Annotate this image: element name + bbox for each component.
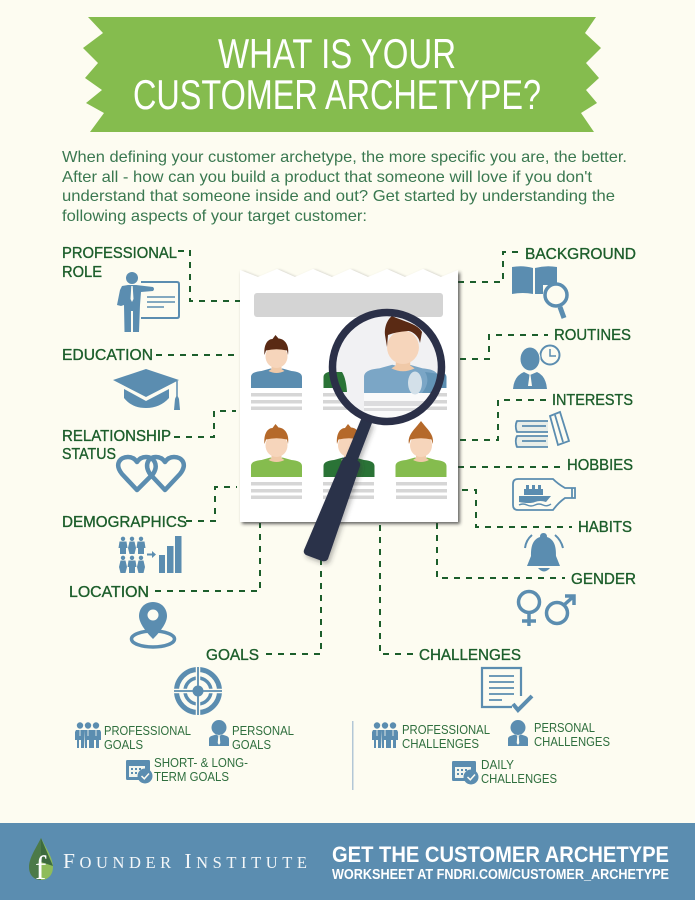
footer band: [0, 823, 695, 900]
label: background: BACKGROUND: [525, 246, 636, 263]
challenges: daily: [452, 757, 557, 786]
goals: personal: [209, 720, 294, 752]
icon: target: [173, 666, 223, 716]
lens rim: [332, 312, 442, 422]
lens glass: [335, 315, 439, 419]
label: professional role: ROLE: [62, 264, 102, 281]
challenges: personal: PERSONAL: [534, 720, 595, 735]
call to action: GET THE CUSTOMER ARCHETYPE: [332, 842, 669, 867]
challenges: daily: CHALLENGES: [481, 771, 557, 786]
challenges: personal: CHALLENGES: [534, 734, 610, 749]
label: demographics: DEMOGRAPHICS: [62, 514, 187, 531]
label: interests: INTERESTS: [552, 392, 633, 409]
icon: ship in a bottle: [513, 479, 575, 510]
icon: checklist document: [482, 668, 532, 710]
challenges: professional: PROFESSIONAL: [402, 722, 490, 737]
icon: gender symbols: [518, 592, 574, 626]
icon: person with clock: [513, 346, 560, 389]
label: relationship status: RELATIONSHIP: [62, 428, 171, 445]
label: relationship status: STATUS: [62, 446, 116, 463]
goals: personal: GOALS: [232, 737, 271, 752]
challenges: daily: DAILY: [481, 757, 514, 772]
title banner: [83, 17, 601, 132]
icon: graduation cap: [113, 369, 180, 410]
magnifying glass: [304, 312, 454, 561]
label: relationship status: [62, 428, 171, 463]
icon: bell: [525, 533, 563, 572]
intro paragraph: following aspects of your target customer:: [62, 208, 367, 225]
challenges: professional: [372, 722, 490, 751]
person 6: [396, 421, 446, 477]
icon: presenter at board: [117, 272, 180, 332]
wordmark: F OUNDER I NSTITUTE: [63, 849, 307, 873]
label: habits: HABITS: [578, 519, 632, 536]
dashed connectors: [155, 250, 572, 654]
goals: short and long term: TERM GOALS: [154, 769, 229, 784]
label: hobbies: HOBBIES: [567, 457, 633, 474]
label: gender: GENDER: [571, 571, 636, 588]
label: goals: GOALS: [206, 647, 259, 664]
paper: [240, 269, 458, 522]
magnified person: [336, 316, 438, 418]
person 2: [324, 368, 374, 388]
person 3: [396, 368, 446, 388]
label: education: EDUCATION: [62, 347, 153, 364]
intro paragraph: When defining your customer archetype, the more specific you are, the better.: [62, 149, 627, 166]
label: professional role: PROFESSIONAL: [62, 245, 177, 262]
goals: short and long term: [126, 755, 248, 784]
goals: short and long term: SHORT- & LONG-: [154, 755, 248, 770]
person 5: [324, 424, 374, 477]
call to action: [332, 842, 669, 883]
handle: [304, 417, 372, 561]
label: location: LOCATION: [69, 584, 149, 601]
person 1: [251, 335, 302, 388]
challenges: personal: [508, 720, 610, 749]
customer profile sheet: [240, 269, 458, 522]
header bar: [254, 293, 443, 317]
icon: people to bar chart: [118, 536, 182, 573]
icon: stack of books: [515, 412, 569, 447]
label: professional role: [62, 245, 177, 281]
person 4: [251, 424, 302, 477]
goals: professional: GOALS: [104, 737, 143, 752]
goals: professional: PROFESSIONAL: [104, 723, 191, 738]
icon: linked hearts: [118, 457, 184, 490]
intro paragraph: After all - how can you build a product that someone will love if you don't: [62, 169, 593, 186]
goals: professional: [75, 722, 191, 752]
icon: map pin: [132, 602, 174, 647]
goals: personal: PERSONAL: [232, 723, 294, 738]
label: routines: ROUTINES: [554, 327, 631, 344]
intro paragraph: understand that someone inside and out? Get started by understanding the: [62, 188, 615, 205]
logo: Founder Institute leaf: [29, 838, 53, 887]
intro paragraph: [62, 149, 627, 225]
label: challenges: CHALLENGES: [419, 647, 521, 664]
icon: book and magnifier: [512, 266, 567, 318]
challenges: professional: CHALLENGES: [402, 736, 479, 751]
title banner: CUSTOMER ARCHETYPE?: [133, 71, 541, 118]
logo: Founder Institute leaf: f: [35, 850, 47, 887]
text lines: [251, 393, 447, 499]
title banner: WHAT IS YOUR: [218, 30, 456, 77]
